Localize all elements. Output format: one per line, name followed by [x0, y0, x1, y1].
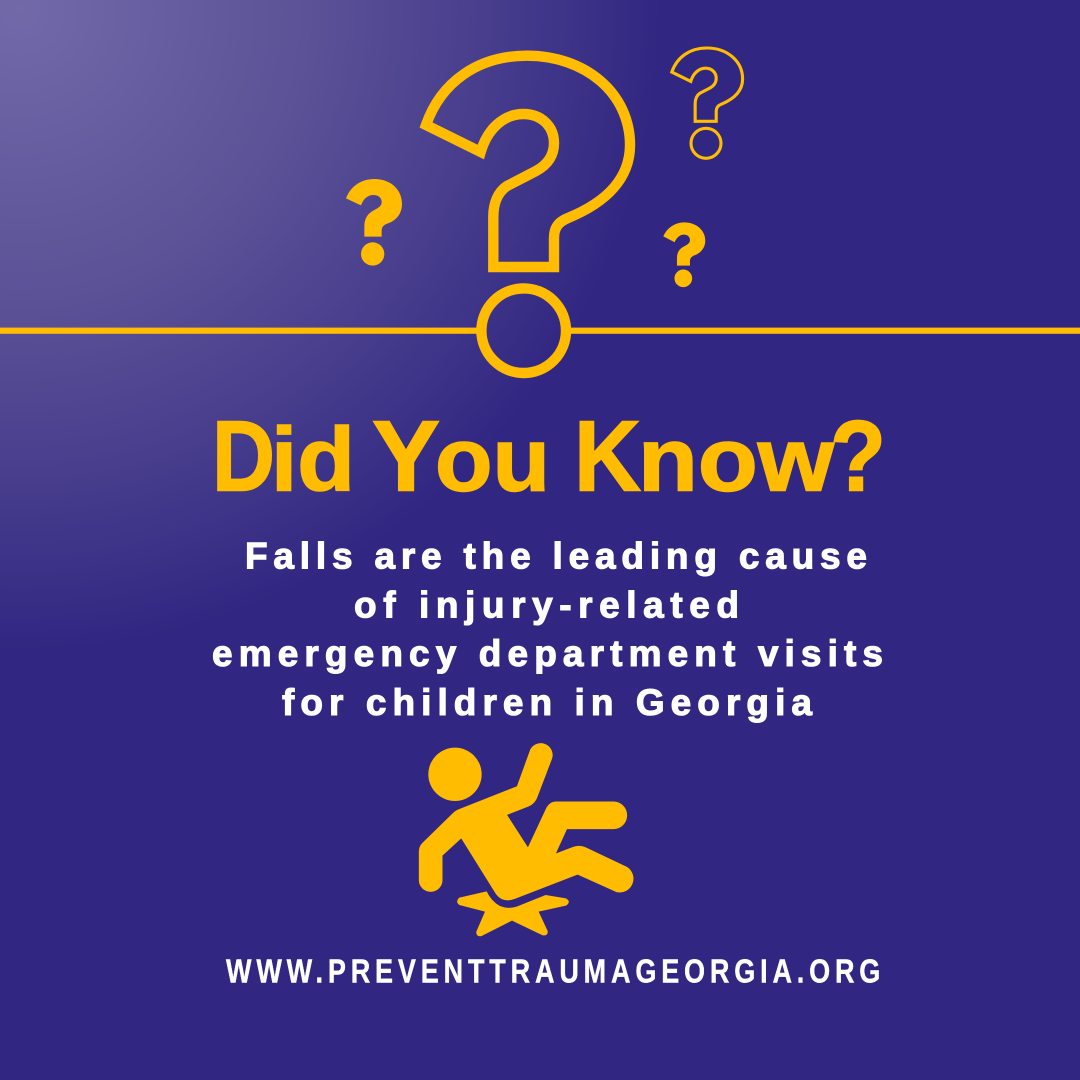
- title: id: [271, 410, 355, 510]
- title: now: [638, 410, 835, 510]
- title: D: [212, 400, 275, 512]
- body text: Falls are the leading cause: [245, 535, 867, 576]
- website footer: WWW.PREVENTTRAUMAGEORGIA.ORG: [226, 954, 880, 990]
- icon: solid question mark right: [663, 222, 705, 287]
- title: Y: [372, 400, 440, 512]
- body text: emergency department visits: [212, 633, 883, 674]
- body text: [212, 535, 883, 723]
- icon: solid question mark left: [346, 179, 402, 266]
- body text: for children in Georgia: [282, 682, 812, 723]
- title: K: [574, 400, 641, 512]
- icon: child falling: [419, 744, 633, 936]
- title: ou: [435, 410, 550, 510]
- icon: small outlined question mark: [672, 48, 743, 158]
- icon: large outlined question mark: [426, 56, 630, 373]
- horizontal divider line: [0, 328, 1080, 334]
- body text: of injury-related: [354, 584, 739, 625]
- title: ?: [830, 400, 886, 512]
- icon: impact star: [457, 891, 569, 936]
